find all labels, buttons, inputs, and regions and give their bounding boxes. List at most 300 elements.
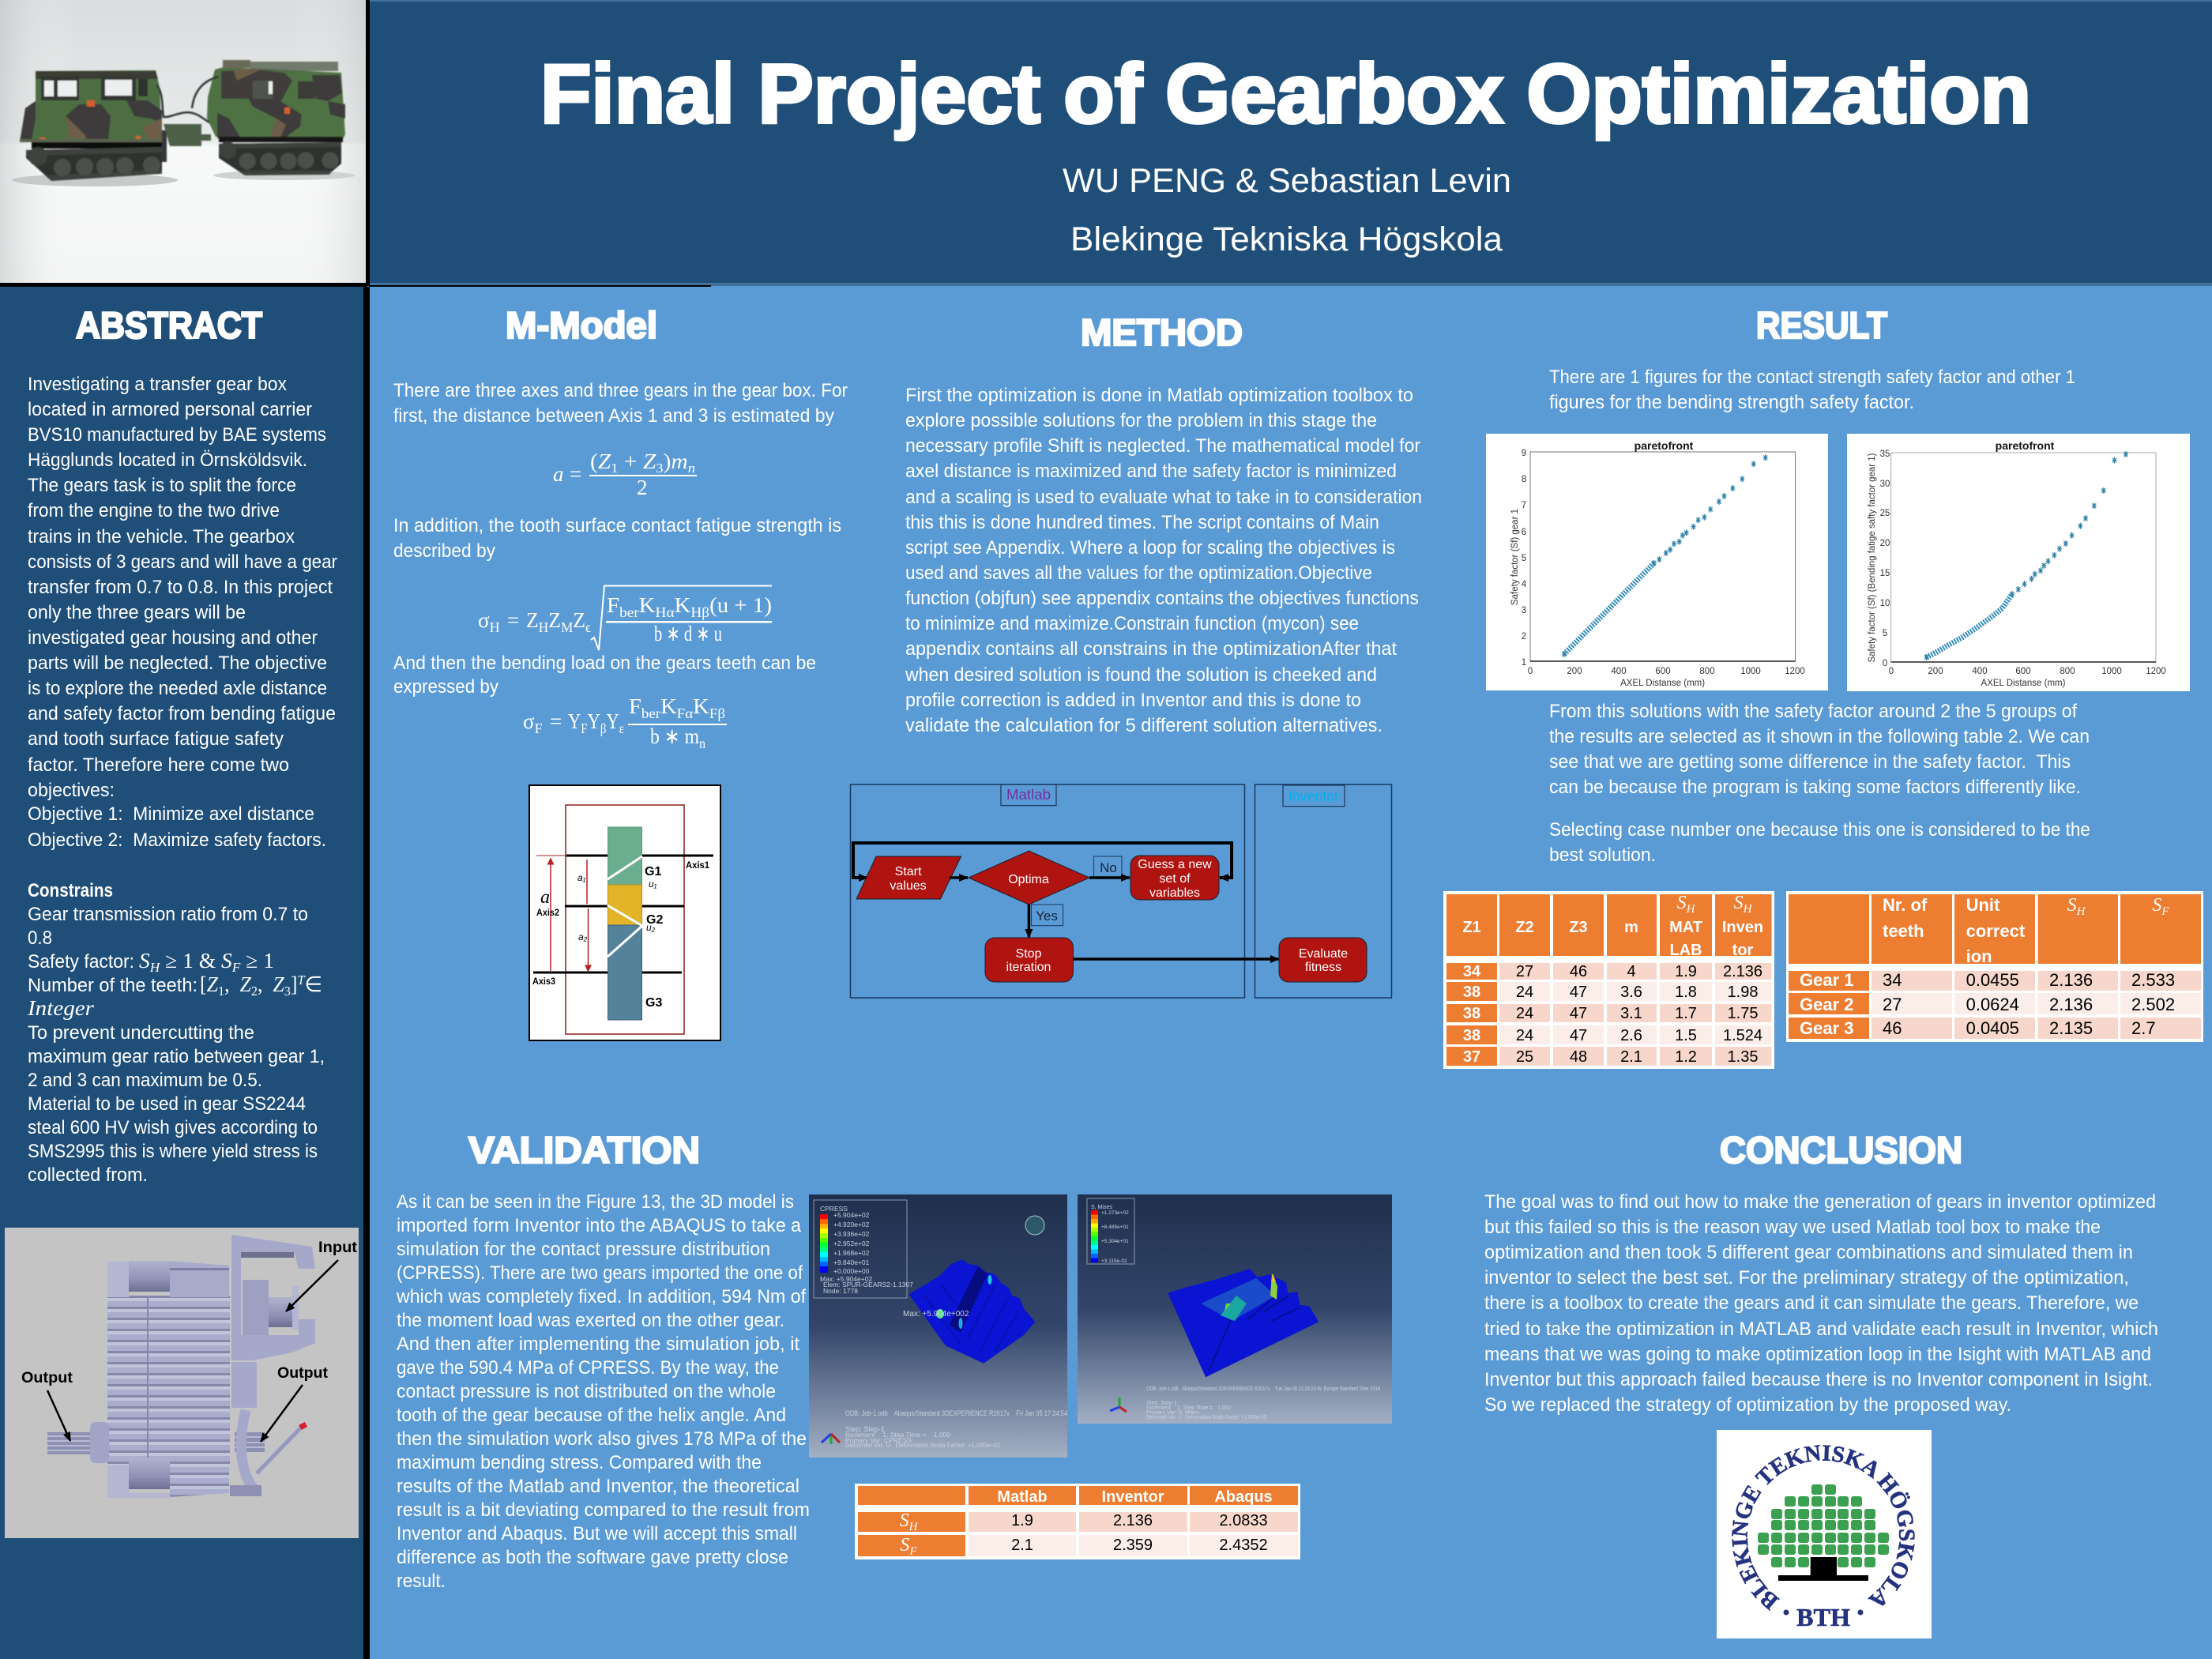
conclusion body text: tried to take the optimization in MATLAB and validate each result in Inventor, which [1484,1319,2158,1340]
formula: bending stress: ber [641,705,660,721]
table: gear parameters: Nr. of [1883,895,1928,915]
table: five gear solutions: 27 [1516,963,1533,980]
validation body text: result is a bit deviating compared to the result from [397,1499,810,1521]
simulation: contact pressure: Deformed Var: U Deformation Scale Factor: +1.000e+01 [845,1441,1000,1449]
table: five gear solutions: 1.35 [1728,1048,1758,1066]
formula: axle distance: ) [664,450,671,473]
abstract body text: trains in the vehicle. The gearbox [28,526,295,547]
constraints text: Z [239,972,252,996]
formula: contact stress: b ∗ d ∗ u [654,622,722,645]
formula: contact stress: Z [548,608,561,632]
simulation: bending stress: S, Mises [1091,1205,1112,1210]
validation body text: imported form Inventor into the ABAQUS to take a [397,1215,802,1236]
validation body text: (CPRESS). There are two gears imported the one of [397,1262,803,1284]
formula: contact stress: ϵ [585,619,591,635]
formula: axle distance: 3 [656,461,664,476]
simulation: contact pressure: +0.000e+00 [833,1267,870,1275]
table: gear parameters: 2.136 [2049,970,2093,990]
table: five gear solutions: Z2 [1515,919,1534,936]
formula: bending stress: Fβ [709,705,725,721]
constraints text: S [221,949,232,972]
arrow to optima [950,876,968,879]
validation body text: contact pressure is not distributed on the whole [397,1381,776,1402]
formula: bending stress: n [699,735,705,751]
simulation: contact pressure: Step: Step-1 [845,1425,885,1433]
node: optima decision [969,851,1089,905]
conclusion body text: Inventor but this approach failed because there is no Inventor component in Isight. [1484,1369,2153,1390]
table: five gear solutions: 37 [1463,1048,1480,1066]
constraints text: ≥ 1 [240,949,274,972]
scatter chart: bending safety factor: 1200 [2146,667,2166,676]
table: method comparison: 2.4352 [1219,1537,1268,1554]
formula: axle distance: n [688,461,695,476]
table: gear parameters: Gear 3 [1800,1018,1853,1038]
table: gear parameters: 27 [1883,995,1902,1014]
validation body text: gave the 590.4 MPa of CPRESS. By the way, the [397,1357,779,1379]
abstract body text: transfer from 0.7 to 0.8. In this project [28,577,333,598]
simulation: contact pressure: Increment 1: Step Time = 1.000 [845,1431,950,1439]
diagram: three gear axes: G1 [645,865,661,878]
label: yes: Yes [1036,908,1058,924]
table: method comparison: Inventor [1102,1488,1164,1506]
table: method comparison: S [900,1535,909,1556]
diagram: three gear axes: G3 [645,996,662,1010]
table: gear parameters: F [2161,905,2169,918]
validation body text: And then after implementing the simulation job, it [397,1334,799,1355]
table: five gear solutions: S [1677,893,1687,913]
table: five gear solutions: 24 [1516,984,1533,1001]
constraints text: Number of the teeth: [28,975,198,996]
table: five gear solutions: 38 [1463,1027,1480,1044]
diagram: three gear axes: G2 [646,913,663,927]
simulation: contact pressure: +3.936e+02 [833,1230,870,1238]
table: five gear solutions: 47 [1570,1005,1587,1022]
abstract body text: Objective 1: Minimize axel distance [28,803,314,825]
panel: result [1443,304,2203,1069]
table: five gear solutions: 1.98 [1728,984,1758,1001]
scatter chart: bending safety factor: 0 [1883,659,1887,668]
formula: axle distance: 1 [611,461,619,476]
constraints text: 0.8 [28,927,52,949]
formula: bending stress: F [629,694,641,718]
simulation: bending stress: Step: Step-1 [1146,1401,1177,1406]
method body text: necessary profile Shift is neglected. The mathematical model for [905,435,1420,457]
diagram: three gear axes: a₁ [577,872,586,883]
table: method comparison [855,1484,1300,1559]
formula: bending stress: ε [619,720,624,736]
formula: bending stress: Y [588,709,600,733]
logo: BTH: BTH [1796,1603,1850,1631]
formula: axle distance: a [553,462,564,486]
conclusion body text: there is a toolbox to create the gears and it can simulate the gears. Therefore, we [1484,1292,2139,1314]
table: five gear solutions [1443,891,1774,1069]
constraints text: ∈ [304,972,322,996]
simulation: contact pressure: Max: +5.904e+02 [820,1275,872,1283]
abstract body text: Investigating a transfer gear box [28,374,287,395]
validation body text: result. [397,1571,446,1592]
arrow to stop iteration [1028,905,1030,938]
node: evaluate fitness: fitness [1305,961,1341,974]
simulation: bending stress: Increment 1: Step Time = 1.000 [1146,1405,1232,1411]
method body text: this this is done hundred times. The script contains of Main [905,512,1379,533]
abstract body text: only the three gears will be [28,602,246,623]
result discussion text: From this solutions with the safety factor around 2 the 5 groups of [1549,701,2077,722]
table: gear parameters: teeth [1883,921,1924,941]
constraints text: steal 600 HV wish gives according to [28,1117,318,1138]
gearbox 3D render with output and input labels: Output [21,1370,73,1386]
diagram: three gear axes: u₂ [646,922,656,933]
heading: conclusion: CONCLUSION [1720,1129,1962,1171]
scatter chart: contact safety factor: 7 [1522,501,1526,510]
node: optima decision: Optima [1008,873,1049,886]
constraints text: ] [291,972,297,996]
table: five gear solutions: 24 [1516,1027,1533,1044]
validation body text: results of the Matlab and Inventor, the theoretical [397,1476,799,1497]
abstract body text: The gears task is to split the force [28,475,296,496]
table: gear parameters: ion [1966,946,1992,966]
method body text: axel distance is maximized and the safety factor is minimized [905,461,1397,482]
scatter chart: contact safety factor: 200 [1567,667,1582,676]
table: gear parameters: 0.0624 [1966,995,2019,1014]
simulation: bending stress: Primary Var: S, Mises [1146,1410,1200,1416]
intro text: first, the distance between Axis 1 and 3 is estimated by [393,405,834,427]
panel: validation [396,1129,1392,1592]
validation body text: difference as both the software gave pretty close [397,1547,788,1568]
node: guess new variables: Guess a new [1138,858,1212,871]
photo: articulated tracked vehicle [0,0,366,283]
formula: bending stress: σ [523,709,535,733]
lane: Inventor: Inventor [1288,788,1339,804]
intro text: There are three axes and three gears in the gear box. For [393,380,848,401]
label: no: No [1100,860,1117,875]
conclusion body text [1484,1191,2158,1416]
formula: contact stress: (u + 1) [709,593,772,617]
validation body text: maximum bending stress. Compared with the [397,1452,762,1473]
formula: contact stress: Z [526,608,539,632]
feedback loop line [853,843,1232,878]
text: bending load: expressed by [393,676,498,698]
scatter chart: contact safety factor: 8 [1522,475,1526,484]
node: stop iteration [985,938,1073,982]
table: five gear solutions: 1.8 [1675,984,1697,1001]
formula: bending stress: F [535,720,543,736]
simulation: bending stress: +5.304e+01 [1101,1239,1129,1244]
constraints text: 1 [218,984,224,999]
method body text [905,385,1422,736]
table: gear parameters: Unit [1966,895,2000,915]
simulation: contact pressure: +9.840e+01 [833,1258,870,1266]
authors: WU PENG & Sebastian Levin [1063,162,1511,200]
table: five gear solutions: 1.75 [1728,1005,1758,1022]
abstract body text: consists of 3 gears and will have a gear [28,551,337,573]
table: method comparison: 2.136 [1113,1512,1153,1529]
formula: bending stress: Fα [677,705,694,721]
constraints text: Constrains [28,880,113,901]
table: five gear solutions: 2.6 [1620,1027,1642,1044]
scatter chart: bending safety factor: paretofront [1996,439,2055,452]
method body text: explore possible solutions for the problem in this stage the [905,410,1377,431]
table: method comparison: Abaqus [1214,1488,1273,1506]
formula: contact stress: = [507,608,519,632]
formula: bending stress: Y [606,709,619,733]
table: gear parameters: Gear 2 [1800,995,1853,1014]
table: gear parameters: 2.135 [2049,1018,2093,1038]
simulation: contact pressure: Elem: SPUR-GEARS2-1.1307 [823,1281,913,1288]
table: five gear solutions: 46 [1570,963,1587,980]
formula: contact stress: M [561,619,573,635]
scatter chart: contact safety factor: 4 [1522,580,1527,589]
simulation: contact pressure: +1.968e+02 [833,1249,870,1257]
scatter chart: contact safety factor: 800 [1699,667,1715,676]
abstract body text [28,374,337,851]
node: guess new variables: set of [1159,872,1191,886]
scatter chart: bending safety factor: 600 [2015,667,2031,676]
table: five gear solutions: 1.524 [1723,1027,1762,1044]
formula: bending stress: K [693,694,709,718]
formula: axle distance: m [671,450,688,473]
result discussion text: the results are selected as it shown in the following table 2. We can [1549,726,2090,747]
diagram: three gear axes: Axis3 [532,976,555,987]
table: five gear solutions: 2.136 [1723,963,1762,980]
table: five gear solutions: MAT [1669,919,1702,936]
simulation: contact pressure: Primary Var: CPRESS [845,1436,912,1444]
constraints text: maximum gear ratio between gear 1, [28,1046,325,1067]
table: five gear solutions: m [1624,919,1638,936]
formula: contact stress: Hα [656,604,675,620]
method body text: to minimize and maximize.Constrain function (mycon) see [905,613,1359,634]
validation body text: As it can be seen in the Figure 13, the 3D model is [397,1191,794,1213]
arrow to evaluate fitness [1073,957,1279,961]
result discussion text: see that we are getting some difference in the safety factor. This [1549,751,2071,773]
node: evaluate fitness: Evaluate [1299,947,1348,961]
heading: method: METHOD [1081,311,1243,353]
conclusion body text: but this failed so this is the reason way we used Matlab tool box to make the [1484,1217,2101,1238]
table: five gear solutions: 24 [1516,1005,1533,1022]
formula: bending stress: F [581,720,588,736]
constraints text: Z [273,972,285,996]
scatter chart: bending safety factor: 25 [1880,509,1890,518]
gearbox 3D render with output and input labels [5,1228,359,1538]
formula: contact stress: K [675,593,691,617]
method body text: script see Appendix. Where a loop for scaling the objectives is [905,537,1395,559]
conclusion body text: optimization and then took 5 different gear combinations and simulated them in [1484,1242,2133,1263]
simulation: bending stress: +3.115e-02 [1101,1258,1127,1264]
table: five gear solutions: 47 [1570,1027,1587,1044]
table: five gear solutions: 3.6 [1620,984,1642,1001]
simulation: contact pressure: Node: 1778 [823,1287,858,1295]
table: method comparison: Matlab [997,1488,1048,1506]
scatter chart: bending safety factor [1847,434,2190,691]
result discussion text: can be because the program is taking some factors differently like. [1549,777,2081,798]
constraints text: 2 [251,984,258,999]
table: five gear solutions: 47 [1570,984,1587,1001]
node: stop iteration: iteration [1006,961,1051,974]
conclusion body text: means that we was going to make optimization loop in the Isight with MATLAB and [1484,1344,2151,1365]
method body text: function (objfun) see appendix contains the objectives functions [905,588,1419,609]
gearbox 3D render with output and input labels: Output [277,1365,329,1382]
table: gear parameters: S [2152,895,2161,916]
simulation: bending stress [1078,1194,1392,1424]
constraints text: H [149,960,161,975]
table: five gear solutions: 1.2 [1675,1048,1697,1066]
abstract body text: Hägglunds located in Örnsköldsvik. [28,450,307,471]
constraints text: 2 and 3 can maximum be 0.5. [28,1070,262,1091]
table: five gear solutions: 38 [1463,1005,1480,1022]
heading: M-Model: M-Model [506,304,657,346]
abstract body text: and safety factor from bending fatigue [28,703,336,724]
table: method comparison: 2.359 [1113,1537,1153,1554]
scatter chart: contact safety factor: Safety factor (Sf) gear 1 [1510,509,1520,605]
abstract body text: is to explore the needed axle distance [28,678,327,699]
scatter chart: contact safety factor [1486,434,1828,690]
table: gear parameters: 2.502 [2131,995,2175,1014]
table: gear parameters [1786,891,2203,1042]
result intro text [1549,367,2075,413]
method body text: used and saves all the values for the optimization.Objective [905,562,1372,584]
arrow to guess node [1089,876,1130,879]
scatter chart: contact safety factor: 6 [1522,528,1526,537]
table: gear parameters: 0.0455 [1966,970,2019,990]
scatter chart: contact safety factor: 1000 [1740,667,1761,676]
table: gear parameters: 2.136 [2049,995,2093,1014]
constraints text: F [231,960,241,975]
method body text: validate the calculation for 5 different solution alternatives. [905,715,1382,736]
diagram: three gear axes: a [540,887,550,908]
table: five gear solutions: 1.5 [1675,1027,1697,1044]
result discussion text: best solution. [1549,845,1656,866]
scatter chart: bending safety factor: 20 [1880,539,1890,548]
table: gear parameters: S [2067,895,2077,916]
constraints text: ≥ 1 & [160,949,221,972]
simulation: contact pressure: +5.904e+02 [833,1211,870,1219]
formula: axle distance: 2 [637,476,648,499]
diagram: three gear axes [529,785,720,1040]
scatter chart: contact safety factor: 1200 [1785,667,1805,676]
method body text: profile correction is added in Inventor and this is done to [905,690,1361,711]
result intro text: figures for the bending strength safety factor. [1549,392,1914,413]
abstract body text: from the engine to the two drive [28,500,280,521]
scatter chart: contact safety factor: 400 [1611,667,1627,676]
formula: bending stress: K [660,694,677,718]
node: guess new variables: variables [1149,886,1200,900]
scatter chart: bending safety factor: 400 [1972,667,1988,676]
heading: validation: VALIDATION [468,1129,700,1171]
node: start values [856,856,961,899]
table: five gear solutions: 38 [1463,984,1480,1001]
table: method comparison: 1.9 [1011,1512,1033,1529]
method body text: First the optimization is done in Matlab optimization toolbox to [905,385,1413,406]
lane: Inventor [1255,784,1392,998]
table: five gear solutions: 34 [1463,963,1481,980]
table: five gear solutions: S [1734,893,1744,913]
table: method comparison: S [900,1510,909,1531]
abstract body text: objectives: [28,780,115,801]
formula: bending stress [523,694,727,751]
scatter chart: contact safety factor: 9 [1522,449,1526,458]
table: gear parameters: correct [1966,921,2026,941]
formula: contact stress: H [490,619,500,635]
text: bending load [393,653,816,698]
diagram: three gear axes: Axis1 [686,860,709,871]
scatter chart: contact safety factor: AXEL Distanse (mm) [1620,679,1705,688]
abstract body text: factor. Therefore here come two [28,754,289,776]
scatter chart: bending safety factor: 200 [1928,667,1943,676]
heading: abstract: ABSTRACT [76,304,262,346]
simulation: contact pressure: CPRESS [820,1205,848,1213]
scatter chart: bending safety factor: 1000 [2101,667,2122,676]
scatter chart: bending safety factor: AXEL Distanse (mm) [1981,679,2066,688]
method body text: and a scaling is used to evaluate what to take in to consideration [905,487,1422,508]
method body text: when desired solution is found the solution is cheeked and [905,664,1377,686]
constraints text: [Z [200,972,219,996]
simulation: contact pressure: +2.952e+02 [833,1240,870,1247]
scatter chart: bending safety factor: 0 [1889,667,1894,676]
table: method comparison: F [908,1545,917,1558]
conclusion body text: inventor to select the best set. For the preliminary strategy of the optimization, [1484,1267,2129,1288]
scatter chart: contact safety factor: 0 [1528,667,1533,676]
formula: bending stress: b ∗ m [650,724,706,748]
formula: bending stress: = [550,709,562,733]
simulation: contact pressure: +4.920e+02 [833,1221,870,1228]
title: Final Project of Gearbox Optimization [540,47,2031,141]
table: five gear solutions: Inven [1722,919,1763,936]
constraints text [27,880,325,1186]
panel: abstract [0,287,370,1659]
text: contact fatigue: In addition, the tooth surface contact fatigue strength is [393,515,841,536]
diagram: three gear axes: Axis2 [536,907,559,918]
table: gear parameters: 0.0405 [1966,1018,2019,1038]
heading: result: RESULT [1756,304,1887,346]
table: five gear solutions: Z1 [1462,919,1481,936]
validation body text: tooth of the gear because of the helix angle. And [397,1405,786,1426]
result discussion text [1549,701,2090,866]
constraints text: Gear transmission ratio from 0.7 to [28,904,308,925]
constraints text: , [224,972,239,996]
panel: method [850,311,1422,998]
simulation: contact pressure: ODB: Job-1.odb Abaqus/Standard 3DEXPERIENCE R2017x Fri Jan 05 17:24:54 [845,1409,1067,1417]
abstract body text: located in armored personal carrier [28,399,312,420]
scatter chart: contact safety factor: paretofront [1635,439,1694,452]
text: contact fatigue: described by [393,540,495,562]
arrow into guess node [1220,876,1233,879]
table: five gear solutions: 1.9 [1675,963,1697,980]
node: start values: Start [895,865,922,878]
label: yes [1032,905,1063,926]
node: guess new variables [1130,856,1219,900]
constraints text: 3 [284,984,291,999]
node: stop iteration: Stop [1016,947,1042,961]
conclusion body text: The goal was to find out how to make the generation of gears in inventor optimized [1484,1191,2156,1213]
table: five gear solutions: Z3 [1569,919,1588,936]
constraints text: Integer [27,996,95,1020]
formula: contact stress: Hβ [690,604,709,620]
constraints text: collected from. [28,1164,148,1186]
formula: axle distance: = [570,462,581,486]
scatter chart: bending safety factor: 15 [1880,569,1890,578]
constraints text: , [258,972,273,996]
gearbox 3D render with output and input labels: Input [318,1240,358,1256]
diagram: three gear axes: a₂ [578,931,588,942]
constraints text: S [139,949,150,972]
formula: contact stress: K [639,593,656,617]
photo frame lines [0,0,368,286]
lane: Matlab [850,784,1245,998]
scatter chart: contact safety factor: 3 [1522,606,1526,615]
validation body text: Inventor and Abaqus. But we will accept this small [397,1523,797,1544]
table: gear parameters: 2.7 [2131,1018,2156,1038]
table: five gear solutions: 4 [1627,963,1636,980]
simulation: bending stress: +1.273e+02 [1101,1210,1129,1216]
